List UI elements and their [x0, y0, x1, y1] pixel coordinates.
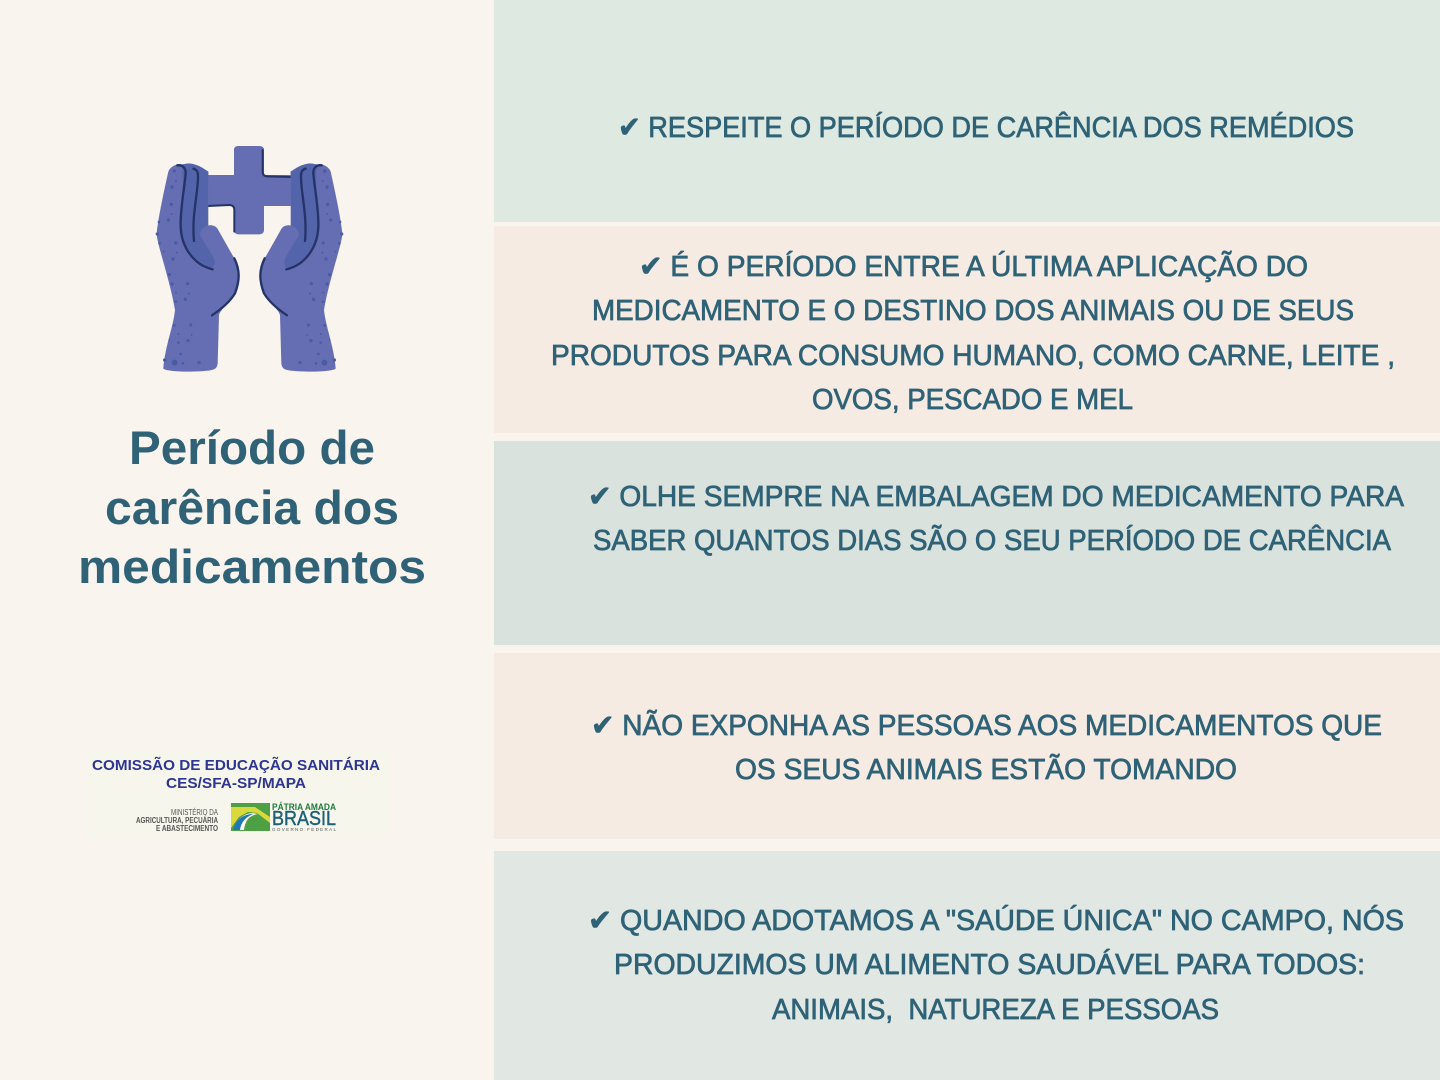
commission name: COMISSÃO DE EDUCAÇÃO SANITÁRIA: [92, 756, 380, 774]
commission name: CES/SFA-SP/MAPA: [166, 775, 306, 792]
government wordmark: BRASIL: [272, 808, 336, 830]
panel: definition of the withdrawal period: [494, 226, 1440, 433]
icon: hands holding medical cross: [156, 146, 343, 372]
panel: one health: PRODUZIMOS UM ALIMENTO SAUDÁVEL PARA TODOS:: [614, 948, 1365, 981]
ministry name: E ABASTECIMENTO: [156, 824, 218, 833]
panel: respect the withdrawal period: [494, 0, 1440, 222]
title: [78, 421, 426, 593]
title: medicamentos: [78, 540, 426, 593]
government wordmark: [272, 802, 336, 832]
panel: one health: ANIMAIS, NATUREZA E PESSOAS: [772, 994, 1219, 1026]
panel: check the packaging: ✔ OLHE SEMPRE NA EMBALAGEM DO MEDICAMENTO PARA: [588, 481, 1405, 513]
panel: definition of the withdrawal period: ✔ É O PERÍODO ENTRE A ÚLTIMA APLICAÇÃO DO: [639, 249, 1308, 283]
ministry name: MINISTÉRIO DA: [171, 808, 219, 817]
icon: government flag mark: [231, 803, 270, 831]
title: Período de: [129, 421, 375, 474]
panel: respect the withdrawal period: ✔ RESPEITE O PERÍODO DE CARÊNCIA DOS REMÉDIOS: [618, 111, 1354, 144]
government wordmark: GOVERNO FEDERAL: [272, 827, 336, 832]
panel: check the packaging: SABER QUANTOS DIAS SÃO O SEU PERÍODO DE CARÊNCIA: [593, 523, 1392, 557]
panel: one health: [494, 851, 1440, 1080]
panel: definition of the withdrawal period: MEDICAMENTO E O DESTINO DOS ANIMAIS OU DE SEUS: [592, 295, 1354, 327]
government wordmark: PÁTRIA AMADA: [272, 802, 336, 812]
panel: check the packaging: [494, 441, 1440, 645]
commission name: [92, 756, 380, 792]
panel: do not expose people: OS SEUS ANIMAIS ESTÃO TOMANDO: [735, 752, 1237, 786]
panel: do not expose people: ✔ NÃO EXPONHA AS PESSOAS AOS MEDICAMENTOS QUE: [591, 708, 1382, 742]
ministry name: AGRICULTURA, PECUÁRIA: [136, 816, 218, 825]
panel: one health: ✔ QUANDO ADOTAMOS A "SAÚDE ÚNICA" NO CAMPO, NÓS: [588, 904, 1404, 937]
panel: definition of the withdrawal period: PRODUTOS PARA CONSUMO HUMANO, COMO CARNE, LEITE ,: [551, 340, 1395, 372]
logo block: Comissão de Educação Sanitária: [88, 752, 388, 838]
panel: do not expose people: [494, 653, 1440, 839]
ministry name: [136, 808, 219, 833]
title: carência dos: [105, 481, 399, 534]
panel: definition of the withdrawal period: OVOS, PESCADO E MEL: [812, 384, 1133, 416]
